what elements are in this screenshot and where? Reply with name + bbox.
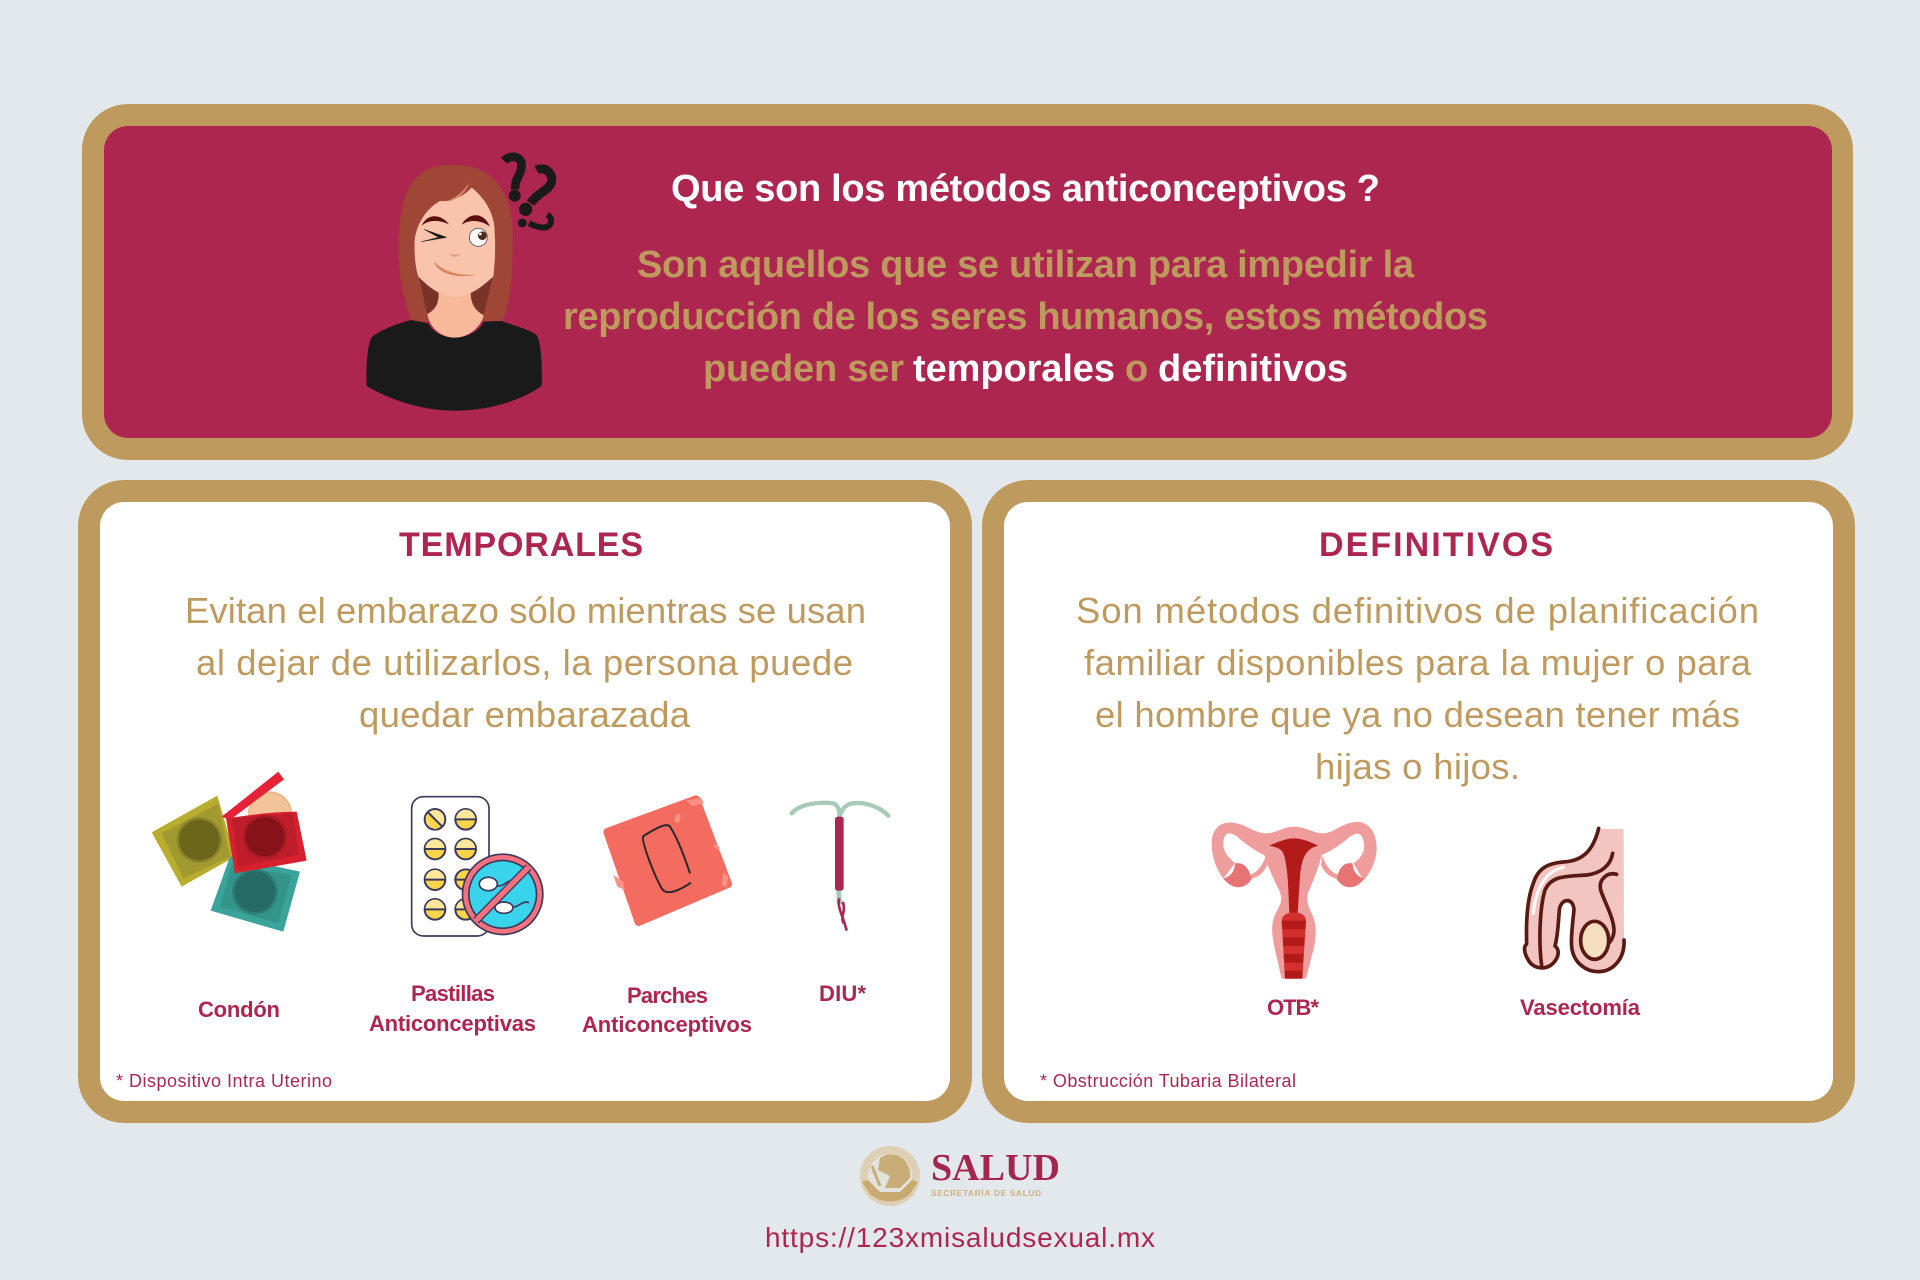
label: OTB: OTB* [1267,995,1319,1020]
title: question: Que son los métodos anticonceptivos ? [671,168,1380,210]
label: pastillas: Anticonceptivas [369,1011,536,1036]
text: definitivos description: el hombre que ya no desean tener más [1095,694,1740,735]
icon: woman winking with question marks [366,157,552,411]
text: definition: reproducción de los seres humanos, estos métodos [563,296,1488,338]
label: parches [582,983,752,1037]
text: definitivos description: Son métodos definitivos de planificación [1076,590,1759,631]
icon: condoms [152,772,307,932]
label: condon: Condón [198,997,280,1022]
icon: contraceptive patch [607,797,728,922]
icon: IUD [792,803,888,931]
panel: temporales [78,480,972,1123]
logo: Secretaría de Salud [860,1146,1060,1206]
icon: uterus [1212,822,1377,979]
icon: national emblem [860,1146,920,1206]
link: website: https://123xmisaludsexual.mx [765,1222,1155,1253]
footnote: OTB: * Obstrucción Tubaria Bilateral [1040,1071,1296,1091]
text: secretaria: SECRETARÍA DE SALUD [931,1189,1041,1198]
text: temporales description: Evitan el embarazo sólo mientras se usan [185,590,866,631]
label: parches: Anticonceptivos [582,1012,752,1037]
icon: male anatomy [1525,828,1624,972]
text: temporales description: al dejar de utilizarlos, la persona puede [196,642,853,683]
text: definition: o [1125,348,1148,390]
label: parches: Parches [627,983,708,1008]
label: pastillas [369,981,536,1036]
heading: definitivos: DEFINITIVOS [1319,526,1553,564]
text: definition: Son aquellos que se utilizan para impedir la [637,244,1415,286]
text: definition: pueden ser [703,348,904,390]
text: definitivos description: hijas o hijos. [1315,746,1520,787]
text: definitivos description: familiar disponibles para la mujer o para [1084,642,1752,683]
panel: definitivos [982,480,1855,1123]
panel: intro banner [82,104,1853,460]
label: DIU: DIU* [819,981,866,1006]
label: vasectomia: Vasectomía [1520,995,1641,1020]
heading: temporales: TEMPORALES [399,526,643,564]
footnote: DIU: * Dispositivo Intra Uterino [116,1071,332,1091]
text: SALUD: SALUD [931,1147,1060,1189]
label: pastillas: Pastillas [411,981,495,1006]
text: definitivos description [1076,590,1759,787]
text: definition: definitivos [1158,348,1348,390]
text: temporales description [185,590,866,735]
text: temporales description: quedar embarazada [359,694,691,735]
icon: contraceptive pills [412,797,544,936]
text: definition: temporales [913,348,1115,390]
text: definition [563,244,1488,390]
